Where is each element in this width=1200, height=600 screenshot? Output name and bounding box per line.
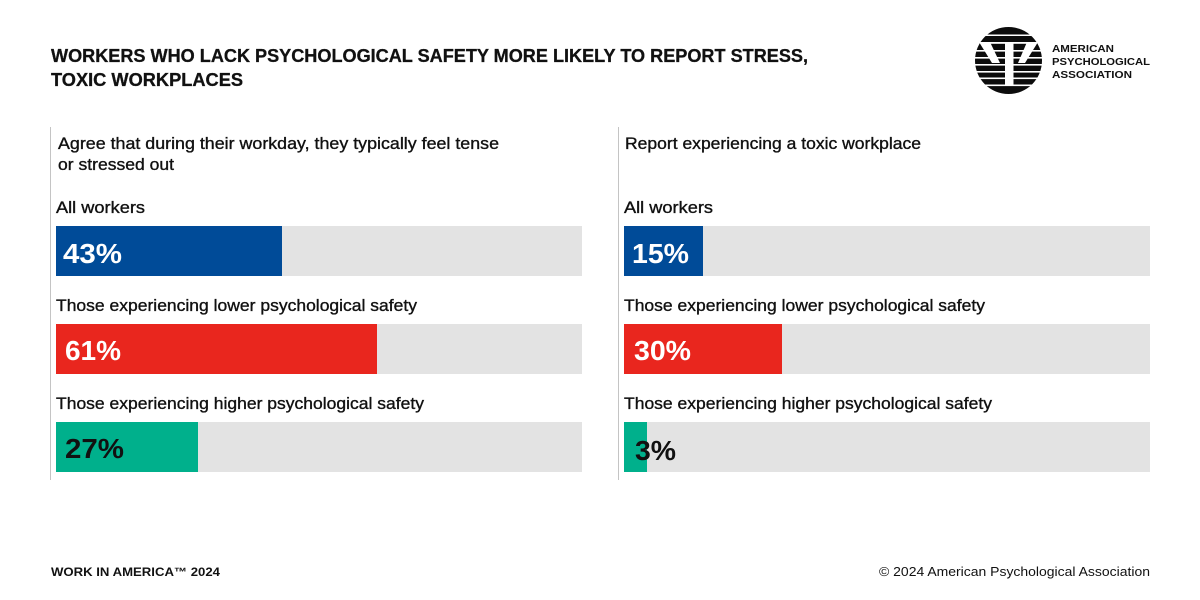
label: lower safety: Those experiencing lower psychological safety (56, 297, 418, 315)
icon: APA psi logo (975, 27, 1042, 94)
label: higher safety: Those experiencing higher psychological safety (624, 395, 993, 413)
bar: higher safety 3%: 3% (635, 435, 676, 466)
title (51, 45, 808, 90)
panel heading: toxic: Report experiencing a toxic workplace (625, 135, 921, 153)
label: all workers: All workers (624, 199, 713, 217)
logo wordmark (1052, 43, 1151, 81)
bar: higher safety 27% (56, 422, 582, 472)
logo wordmark: AMERICAN (1052, 43, 1114, 55)
bar: higher safety 27%: 27% (65, 433, 124, 464)
label: higher safety: Those experiencing higher psychological safety (56, 395, 425, 413)
bar: lower safety 61%: 61% (65, 335, 121, 366)
panel: tense or stressed (50, 127, 582, 480)
bar: lower safety 30%: 30% (634, 335, 691, 366)
logo wordmark: ASSOCIATION (1052, 69, 1132, 81)
bar: all workers 15%: 15% (632, 238, 689, 269)
bar: higher safety 3% (624, 422, 1150, 472)
label: all workers: All workers (56, 199, 145, 217)
panel heading: stress (58, 135, 499, 174)
bar: all workers 15% (624, 226, 1150, 276)
label: lower safety: Those experiencing lower psychological safety (624, 297, 986, 315)
footer: source: WORK IN AMERICA™ 2024 (51, 565, 220, 579)
title: TOXIC WORKPLACES (51, 69, 243, 90)
panel heading: stress: Agree that during their workday, they typically feel tense (58, 135, 499, 153)
panel: toxic workplace (618, 127, 1150, 480)
footer: copyright: © 2024 American Psychological Association (879, 564, 1150, 579)
panel heading: stress: or stressed out (58, 156, 174, 174)
bar: lower safety 61% (56, 324, 582, 374)
bar: all workers 43%: 43% (63, 238, 122, 269)
logo wordmark: PSYCHOLOGICAL (1052, 56, 1151, 68)
bar: all workers 43% (56, 226, 582, 276)
title: WORKERS WHO LACK PSYCHOLOGICAL SAFETY MORE LIKELY TO REPORT STRESS, (51, 45, 808, 66)
bar: lower safety 30% (624, 324, 1150, 374)
